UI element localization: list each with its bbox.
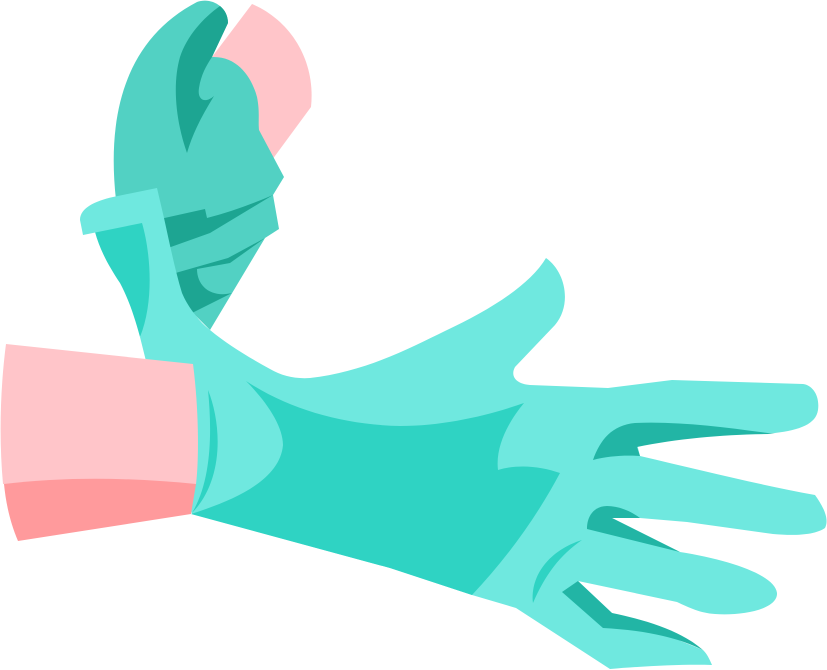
thumb nail shadow	[176, 6, 228, 153]
finger shadow 2	[587, 506, 680, 552]
finger shadow 1	[593, 423, 775, 460]
thumb crease upper	[160, 195, 273, 248]
panel: pink glove cuff fragment behind thumb	[212, 4, 312, 160]
finger crescent	[533, 540, 582, 603]
glove dark palm panel	[191, 381, 560, 595]
panel: sleeve shadow	[4, 479, 196, 541]
panel: pink sleeve	[1, 344, 198, 490]
finger shadow 3	[562, 581, 703, 650]
thumb crease lower	[172, 238, 265, 314]
wrist fold behind hand	[95, 222, 151, 337]
thumb: back of finger	[114, 1, 284, 330]
wrist crescent	[192, 390, 218, 513]
glove hand body	[80, 188, 827, 669]
